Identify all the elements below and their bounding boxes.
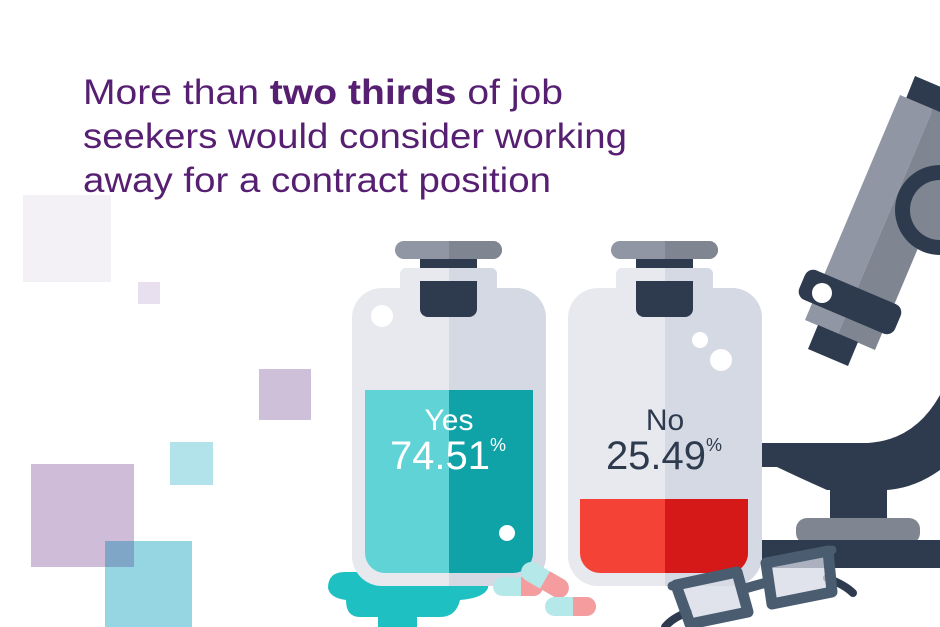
label: no <box>606 404 722 478</box>
pills <box>493 558 596 616</box>
title: away for a contract position <box>83 161 551 200</box>
bottle: no <box>568 241 762 586</box>
label: yes: 74.51 <box>390 434 490 478</box>
liquid: yes <box>365 390 533 573</box>
title <box>83 73 627 200</box>
label: no: No <box>646 404 684 437</box>
bottle: yes <box>352 241 546 586</box>
title: More than two thirds of job <box>83 73 563 112</box>
title: seekers would consider working <box>83 117 627 156</box>
puddle <box>328 572 488 627</box>
tube <box>905 76 940 118</box>
liquid: no <box>580 499 748 573</box>
microscope <box>762 76 940 568</box>
decorative squares <box>23 195 311 627</box>
label: no: % <box>706 435 722 455</box>
glasses <box>665 550 853 627</box>
label: yes: Yes <box>425 404 473 437</box>
arm <box>762 395 940 490</box>
label: yes: % <box>490 435 506 455</box>
label: yes <box>390 404 506 478</box>
label: no: 25.49 <box>606 434 706 478</box>
